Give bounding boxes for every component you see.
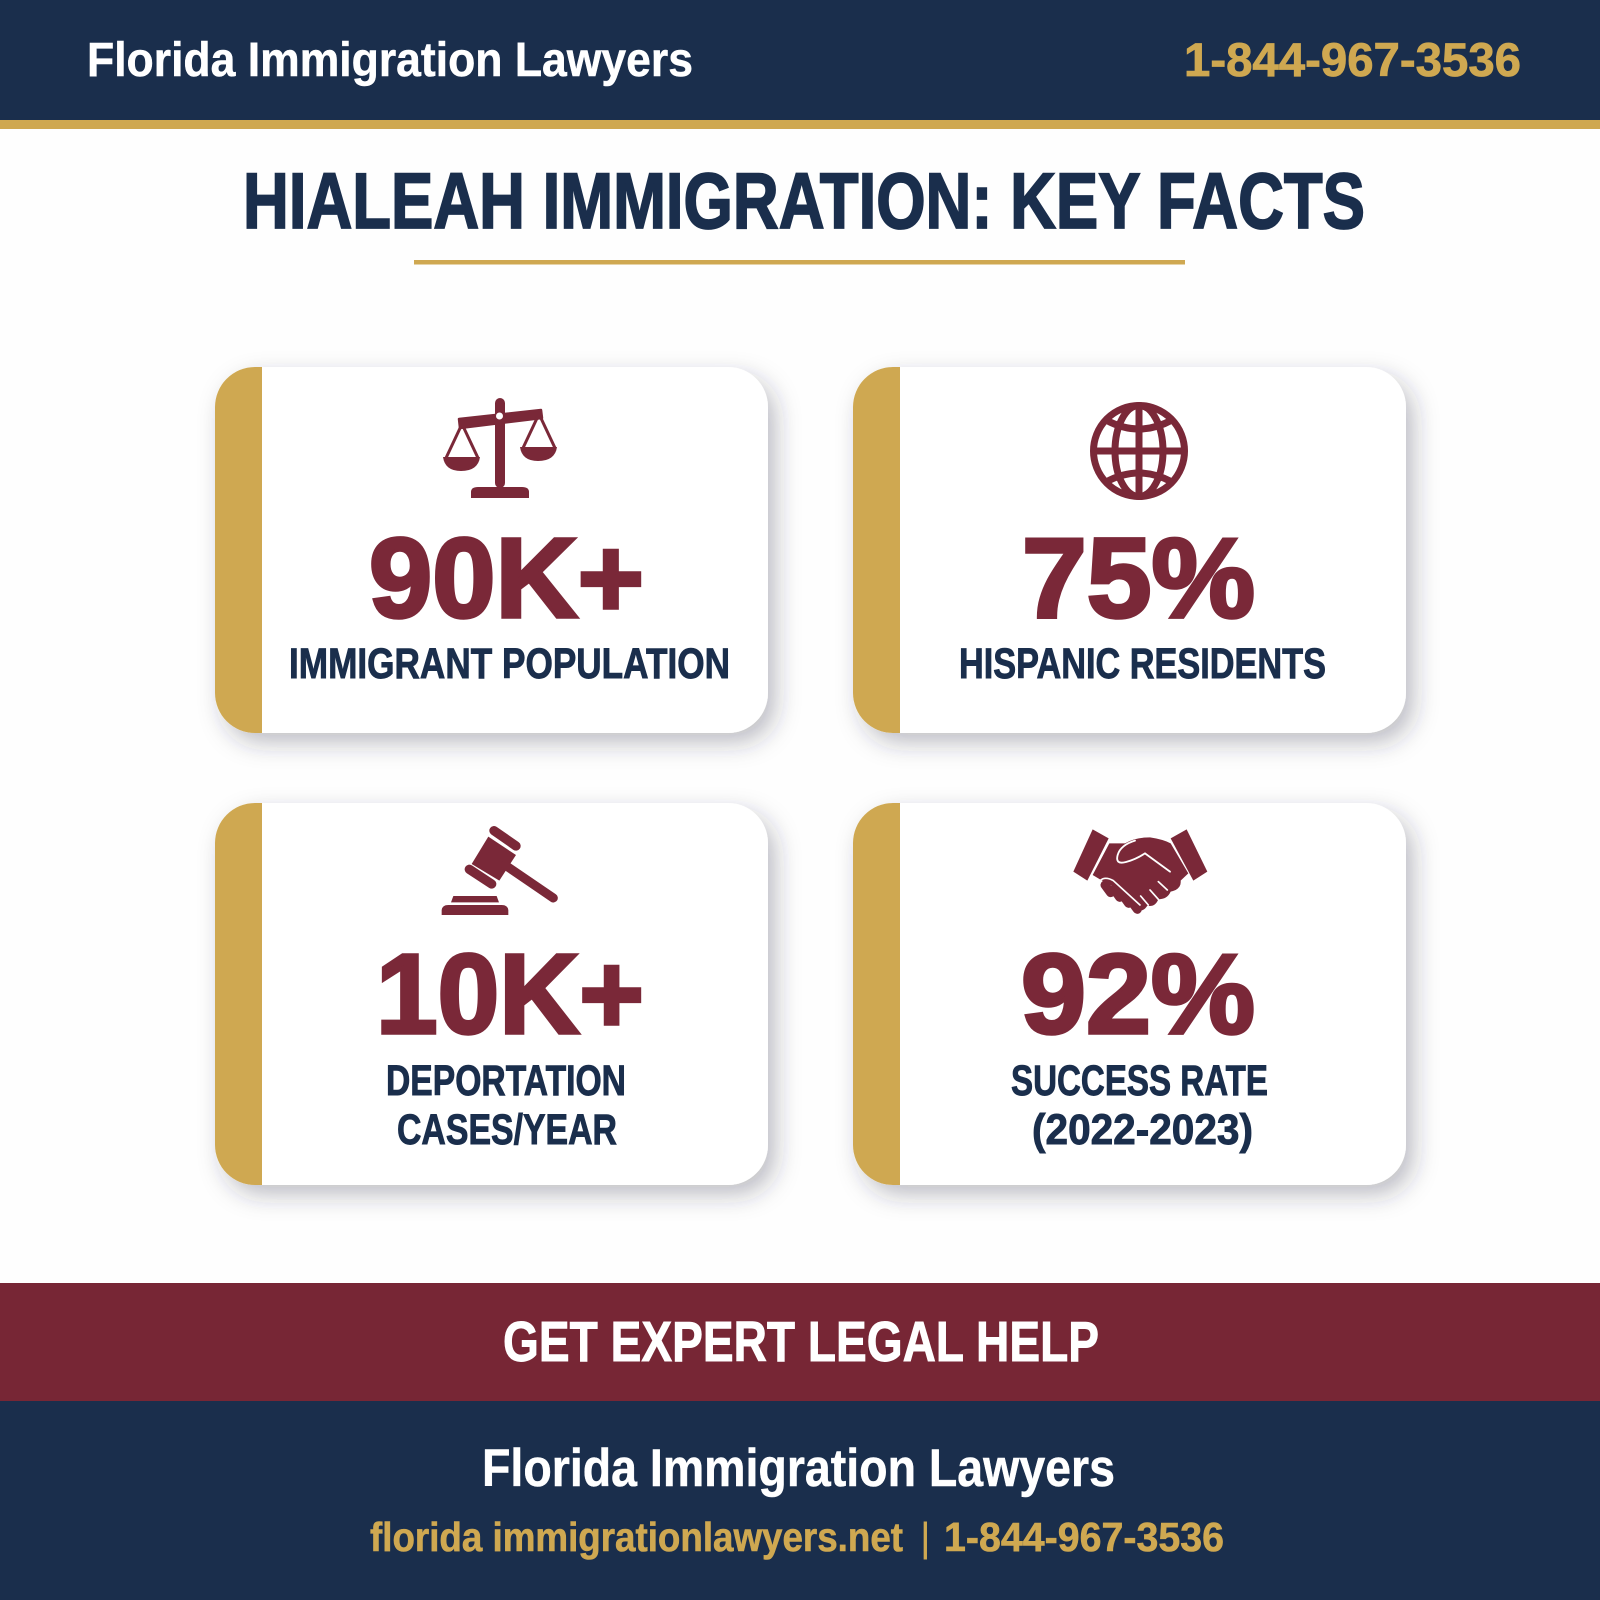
panel: deportation cases [215,803,768,1185]
panel: hispanic residents [853,367,1406,733]
label: deportation cases per year: DEPORTATION [386,1057,626,1105]
footer contact line: | [920,1514,931,1560]
icon: scales of justice [443,398,557,498]
title underline [414,260,1185,264]
header bar [0,0,1600,129]
panel: immigrant population [215,367,768,733]
header phone number: 1-844-967-3536 [1184,33,1521,86]
label: deportation cases per year: CASES/YEAR [397,1106,617,1154]
big number: 92%: 92% [1021,931,1255,1057]
label: deportation cases per year [386,1057,626,1154]
footer [0,1401,1600,1600]
footer firm name: Florida Immigration Lawyers [482,1439,1115,1498]
icon: globe [1093,405,1185,497]
big number: 75%: 75% [1022,515,1255,641]
big number: 10K+: 10K+ [376,931,644,1057]
big number: 90K+: 90K+ [369,515,644,641]
panel: success rate [853,803,1406,1185]
label: success rate 2022-2023: (2022-2023) [1032,1106,1253,1154]
call to action band [0,1283,1600,1401]
header firm name: Florida Immigration Lawyers [87,34,693,87]
title: HIALEAH IMMIGRATION: KEY FACTS [243,156,1365,245]
label: success rate 2022-2023 [1011,1057,1268,1154]
footer contact line: 1-844-967-3536 [944,1514,1224,1560]
footer contact line: florida immigrationlawyers.net [370,1514,903,1560]
label: success rate 2022-2023: SUCCESS RATE [1011,1057,1268,1105]
call to action text: GET EXPERT LEGAL HELP [503,1310,1099,1374]
label: hispanic residents: HISPANIC RESIDENTS [959,640,1326,688]
icon: gavel [442,831,553,915]
icon: handshake [1073,829,1207,911]
label: immigrant population: IMMIGRANT POPULATION [289,640,730,688]
footer contact line [370,1514,1224,1560]
